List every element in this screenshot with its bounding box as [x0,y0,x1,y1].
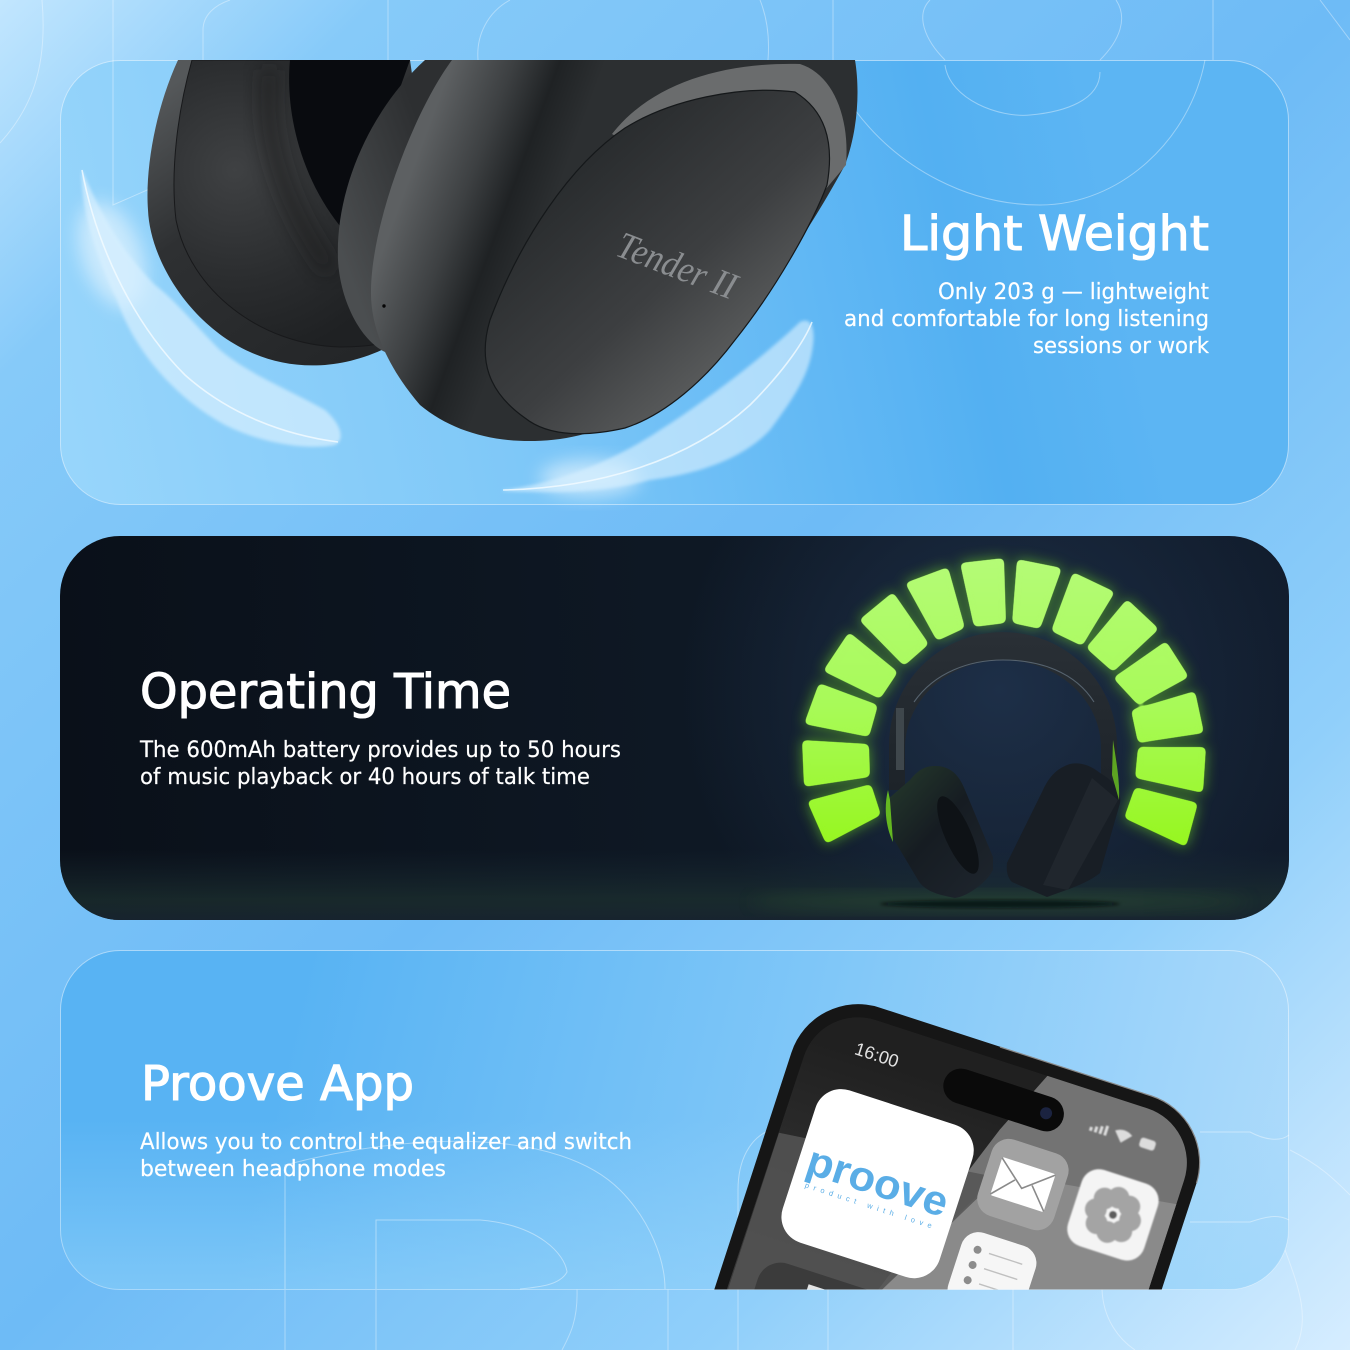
description: proove app: Allows you to control the equalizer and switch [140,1129,632,1155]
screen base [727,1018,1047,1290]
left ear cup [147,60,430,365]
description: proove app [140,1129,632,1182]
screen light lower area [882,1184,1176,1290]
panel: operating time [60,536,1289,920]
app icon: proove: product with love [804,1181,936,1231]
heading: Operating Time: Operating Time [140,664,511,720]
description: light weight: Only 203 g — lightweight [938,279,1209,305]
description: light weight: sessions or work [1033,333,1209,359]
screen light wedge [878,1076,1187,1290]
heading: Light Weight: Light Weight [900,206,1209,262]
mic dot [382,304,386,308]
description: operating time: The 600mAh battery provides up to 50 hours [139,737,621,763]
panel 2 background [60,536,1289,920]
app widget [754,1262,866,1290]
panel 3 background [60,950,1288,1290]
panel 3 outline pattern [285,1130,1289,1289]
headphones silhouette [886,632,1120,898]
heading: Proove App: Proove App [141,1056,414,1112]
left cushion inner hole [289,60,410,232]
icon: right feather [503,321,814,496]
status icons [1088,1124,1157,1152]
panel 1 outline pattern [113,60,1205,205]
panel: light weight [60,60,1288,504]
description: operating time: of music playback or 40 hours of talk time [140,764,590,790]
panel: proove app [60,950,1290,1290]
right cushion [338,60,452,352]
app icon: reminders [948,1232,1036,1290]
phone body [709,1004,1200,1307]
camera island [943,1068,1064,1132]
panel 1 background [60,60,1288,504]
headband [889,632,1117,790]
cup plate [485,90,830,434]
left cushion [174,60,374,348]
cup ring [612,64,846,188]
left ear cup [886,766,993,898]
app icon: mail [977,1138,1069,1230]
screen lower left area [728,1132,984,1290]
description: light weight: and comfortable for long listening [844,306,1209,332]
description: operating time [139,737,621,790]
app icon: photos [1066,1168,1160,1262]
icon: left feather [65,170,341,447]
right ear cup [371,60,858,441]
app icon: proove: proove [801,1136,955,1226]
green rim light [886,790,893,842]
logo signature: Tender II [611,224,745,309]
battery gauge segments [802,558,1206,847]
phone screen [727,1018,1187,1290]
camera lens [1040,1107,1052,1120]
headphones close-up [147,60,858,441]
panel 3 bottom tint [60,950,1288,1290]
right ear cup [1007,763,1120,897]
description: proove app: between headphone modes [140,1156,446,1182]
clock: 16:00 [852,1039,901,1072]
app icon: proove [781,1089,974,1278]
smartphone [714,1004,1200,1290]
phone edge highlight [1000,1047,1200,1183]
description: light weight [844,279,1209,359]
panel 2 glow and floor [60,536,1289,920]
battery gauge glow [802,558,1206,847]
left cushion shading [260,86,310,240]
